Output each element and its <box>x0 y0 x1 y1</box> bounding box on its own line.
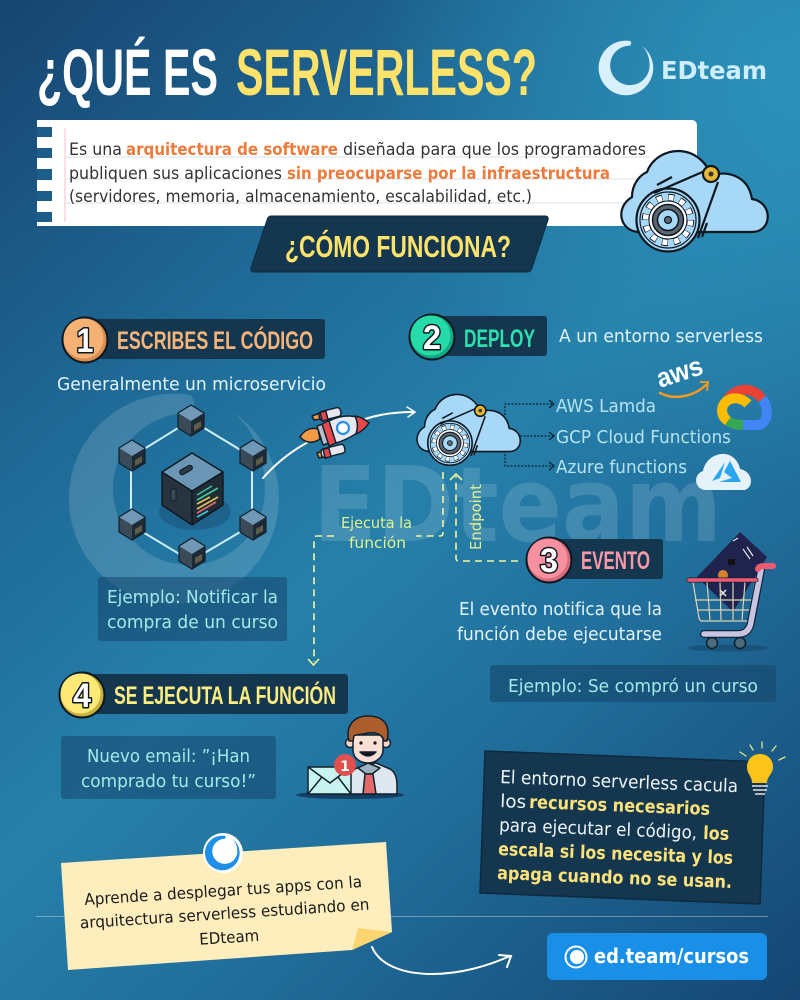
step 3: heading: EVENTO <box>581 547 650 575</box>
title: ¿QUÉ ES <box>37 35 218 109</box>
watermark: EDteam <box>69 394 722 604</box>
text: explanation: para ejecutar el código, <box>499 815 697 844</box>
panel: definition notebook <box>37 120 697 226</box>
step 4: heading <box>60 672 348 718</box>
logo: EDteam: EDteam <box>661 56 767 85</box>
button: ed.team/cursos <box>547 933 767 980</box>
text: definition: diseñada para que los programadores <box>343 140 646 159</box>
callout: ejemplo notificar: compra de un curso <box>107 613 278 633</box>
text: definition: Es una <box>69 140 122 159</box>
arrow: code to cloud <box>263 407 415 478</box>
text: evento description: El evento notifica que la <box>459 599 662 620</box>
label: ejecuta la funcion <box>341 514 412 552</box>
button: ed.team/cursos: ed.team/cursos <box>594 944 749 968</box>
icon: big cloud gear <box>621 151 768 252</box>
title <box>37 35 537 109</box>
icon: light bulb <box>740 742 785 794</box>
callout: nuevo email: comprado tu curso!” <box>81 771 256 792</box>
arrow: endpoint dashed <box>450 474 518 561</box>
list: providers <box>556 396 731 478</box>
text: sticky note: EDteam <box>199 926 260 949</box>
step 1: heading: 1 <box>76 322 94 360</box>
text: explanation: apaga cuando no se usan. <box>497 863 732 893</box>
text: microservicio: Generalmente un microservicio <box>57 374 326 395</box>
icon: shopping cart with course <box>688 532 773 652</box>
icon: azure <box>696 454 751 490</box>
callout: ejemplo notificar: Ejemplo: Notificar la <box>107 588 278 608</box>
list: providers: Azure functions <box>556 457 687 478</box>
icon: central cube <box>159 453 231 530</box>
heading: como funciona: ¿CÓMO FUNCIONA? <box>285 228 511 264</box>
text: explanation: escala si los necesita y los <box>498 839 733 869</box>
label: ejecuta la funcion: Ejecuta la <box>341 514 412 532</box>
text: explanation <box>497 767 738 893</box>
label: endpoint: Endpoint <box>467 484 485 550</box>
text: evento description <box>457 599 662 645</box>
list: providers: AWS Lamda <box>556 396 656 417</box>
text: explanation: los <box>703 823 730 845</box>
arrow: ejecuta la funcion dashed <box>308 472 443 665</box>
step 1: heading: ESCRIBES EL CÓDIGO <box>117 325 313 355</box>
text: definition: arquitectura de software <box>126 140 338 159</box>
callout: nuevo email: Nuevo email: ”¡Han <box>87 746 250 767</box>
text: explanation: El entorno serverless cacula <box>500 767 738 797</box>
step 2: heading <box>410 314 547 360</box>
text: sticky note <box>78 872 372 956</box>
text: explanation: recursos necesarios <box>529 792 710 820</box>
text: definition: sin preocuparse por la infraestructura <box>287 164 610 183</box>
text: evento description: función debe ejecutarse <box>457 624 662 645</box>
step 3: heading <box>526 538 663 582</box>
step 2: heading: DEPLOY <box>464 325 535 353</box>
text: definition: (servidores, memoria, almacenamiento, escalabilidad, etc.) <box>69 187 532 206</box>
panel: sticky note call to action <box>61 833 392 970</box>
step 2: heading: 2 <box>423 319 441 357</box>
icon: small cloud gear <box>417 394 520 465</box>
connectors: cloud to providers <box>505 400 554 470</box>
icon: rocket <box>300 407 369 458</box>
panel: serverless explanation <box>480 751 765 904</box>
title: SERVERLESS? <box>236 35 537 109</box>
icon: aws: aws <box>653 351 707 394</box>
step 1: heading <box>62 318 325 362</box>
text: definition: publiquen sus aplicaciones <box>69 164 282 183</box>
divider <box>36 916 768 918</box>
callout: ejemplo notificar <box>98 577 287 641</box>
text: sticky note: arquitectura serverless estudiando en <box>79 895 370 932</box>
icon: EDteam badge <box>203 833 243 873</box>
heading: como funciona <box>251 216 548 272</box>
text: sticky note: Aprende a desplegar tus apps con la <box>84 872 362 909</box>
text: explanation: los <box>500 791 527 813</box>
step 4: heading: 4 <box>73 677 91 715</box>
icon: person with email <box>296 716 404 799</box>
callout: ejemplo compra <box>490 665 776 702</box>
step 4: heading: SE EJECUTA LA FUNCIÓN <box>114 680 336 710</box>
list: providers: GCP Cloud Functions <box>556 427 731 448</box>
label: ejecuta la funcion: función <box>349 534 406 552</box>
icon: person with email: 1 <box>340 759 350 775</box>
logo: EDteam <box>599 41 767 95</box>
callout: ejemplo compra: Ejemplo: Se compró un curso <box>508 676 758 697</box>
step 3: heading: 3 <box>540 542 558 580</box>
arrow: note to button <box>372 947 511 974</box>
watermark: EDteam: EDteam <box>313 444 722 566</box>
icon: google cloud <box>722 390 767 425</box>
diagram: microservice hexagon <box>119 405 266 569</box>
callout: nuevo email <box>61 736 276 799</box>
text: entorno serverless: A un entorno serverless <box>559 326 763 347</box>
text: definition <box>69 140 646 206</box>
